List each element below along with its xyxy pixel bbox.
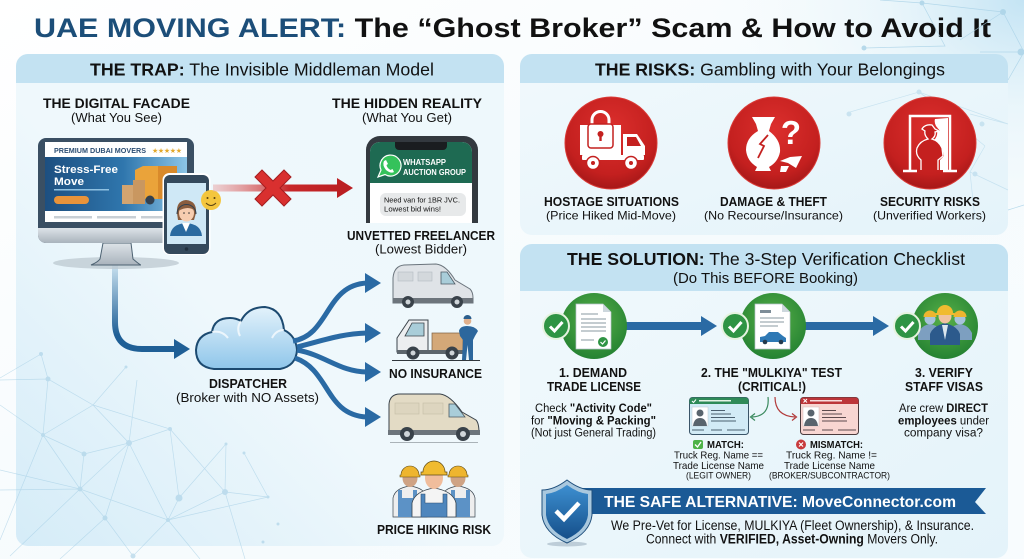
icon: phone with whatsapp group [366,136,478,223]
mismatch text: Truck Reg. Name != [786,450,877,462]
label: unvetted freelancer: (Lowest Bidder) [375,242,467,256]
heading: hidden reality [332,96,482,125]
step 2 label: 2. THE "MULKIYA" TEST [701,366,842,380]
banner description: We Pre-Vet for License, MULKIYA (Fleet Ownership), & Insurance. [611,518,974,533]
icon: dispatcher cloud [196,307,297,369]
decorative network in risks panel [846,90,1008,220]
step 3 label: 3. VERIFY [915,366,974,380]
mismatch text [769,439,890,480]
icon: step 1 trade license document [543,293,627,359]
heading: digital facade: THE DIGITAL FACADE [43,96,190,111]
label: dispatcher: (Broker with NO Assets) [176,390,319,405]
label: damage and theft: DAMAGE & THEFT [720,195,827,209]
arrows: dispatcher to four freelancers [293,273,381,427]
icon: step 3 staff visas [894,293,978,359]
step 1 description [531,403,656,440]
panel heading: the risks: THE RISKS: Gambling with Your Belongings [595,60,945,80]
step 3 label [905,366,983,394]
icon: three workers [393,461,475,517]
label: dispatcher [176,377,319,405]
match text: Truck Reg. Name == [674,450,763,462]
icon: damaged vase [728,97,820,189]
icon: desktop monitor website: Move [54,176,84,188]
label: hostage situations: (Price Hiked Mid-Move) [546,208,676,222]
icon: whatsapp logo [378,155,401,177]
arrow: to match card [750,397,768,420]
label: dispatcher: DISPATCHER [209,377,287,391]
heading: digital facade: (What You See) [71,110,162,125]
check badge [543,313,569,339]
chat bubble: Need van for 1BR JVC. [384,196,460,204]
icon: desktop monitor website: PREMIUM DUBAI MOVERS [54,148,146,155]
step 1 description: for "Moving & Packing" [531,416,656,428]
label: hostage situations [544,195,679,222]
icon: red X [255,170,291,206]
heading: hidden reality: THE HIDDEN REALITY [332,96,482,111]
icon: step 2 mulkiya document [722,293,806,359]
chat bubble [380,193,466,216]
panel heading: the trap: THE TRAP: The Invisible Middleman Model [90,60,434,80]
icon: desktop monitor website [38,138,194,269]
icon: red x [796,440,806,450]
label: unvetted freelancer: UNVETTED FREELANCER [347,228,496,243]
step 3 label: STAFF VISAS [905,380,983,394]
label: security risks: (Unverified Workers) [873,208,986,222]
step 3 description: company visa? [904,428,983,440]
banner description: Connect with VERIFIED, Asset-Owning Movers Only. [646,532,938,546]
panel heading: the solution [567,249,965,287]
step 1 label: TRADE LICENSE [547,380,641,394]
match text: (LEGIT OWNER) [686,470,751,480]
title: UAE MOVING ALERT: The “Ghost Broker” Scam & How to Avoid It [34,13,991,43]
label: no insurance: NO INSURANCE [389,366,482,381]
icon: beige van [388,394,480,443]
icon: mismatch id card [800,398,858,434]
banner description [611,518,974,546]
match text [673,439,764,480]
step 3 description: employees under [898,416,989,428]
arrow: step 1 to 2 [625,316,717,336]
step 1 description: (Not just General Trading) [531,428,656,440]
arrow: monitor to dispatcher [115,262,190,359]
icon: hostage truck [565,97,657,189]
icon: phone with whatsapp group: WHATSAPP [403,158,447,167]
question mark: ? [781,114,801,151]
check badge [894,313,920,339]
icon: verified shield [542,480,592,546]
match text: MATCH: [707,439,744,451]
mismatch text: Trade License Name [784,460,875,472]
panel: the solution [520,244,1008,558]
step 1 label [547,366,641,394]
icon: smiley chat bubble [201,190,221,210]
panel: the trap [16,54,504,546]
chat bubble: Lowest bid wins! [384,204,441,214]
icon: phone with support agent [162,173,221,255]
label: hostage situations: HOSTAGE SITUATIONS [544,195,679,209]
icon: green check [693,440,703,449]
icon: unverified worker at door [884,97,976,189]
panel: the risks [520,54,1008,235]
step 3 description [898,403,989,440]
banner: the safe alternative [582,488,986,514]
arrow: to mismatch card [775,397,796,420]
step 1 description: Check "Activity Code" [535,403,652,415]
arrow: step 2 to 3 [804,316,889,336]
match text: Trade License Name [673,460,764,472]
label: damage and theft [704,195,843,222]
label: damage and theft: (No Recourse/Insurance) [704,208,843,222]
label: security risks: SECURITY RISKS [880,195,980,209]
panel heading: the solution: (Do This BEFORE Booking) [673,270,858,287]
label: security risks [873,195,986,222]
label: price hiking risk: PRICE HIKING RISK [377,523,491,537]
step 2 label [701,366,842,394]
step 2 label: (CRITICAL!) [738,380,806,394]
step 1 label: 1. DEMAND [559,366,627,380]
icon: desktop monitor website: ★★★★★ [152,147,182,155]
icon: pickup truck with worker [392,315,480,361]
label: unvetted freelancer [347,228,496,256]
decorative network left [0,352,280,559]
heading: digital facade [43,96,190,125]
heading: hidden reality: (What You Get) [362,110,452,125]
decorative network top right [862,0,1024,210]
panel heading: the solution: THE SOLUTION: The 3-Step Verification Checklist [567,249,965,269]
arrow: blocked red arrow [213,170,353,206]
mismatch text: MISMATCH: [810,439,863,451]
icon: match id card [690,398,748,434]
mismatch text: (BROKER/SUBCONTRACTOR) [769,470,890,480]
step 3 description: Are crew DIRECT [899,403,988,415]
icon: desktop monitor website: Stress-Free [54,164,118,176]
banner: the safe alternative: THE SAFE ALTERNATIVE: MoveConnector.com [604,494,956,511]
icon: white van [393,264,473,308]
check badge [722,313,748,339]
icon: phone with whatsapp group: AUCTION GROUP [403,168,467,177]
